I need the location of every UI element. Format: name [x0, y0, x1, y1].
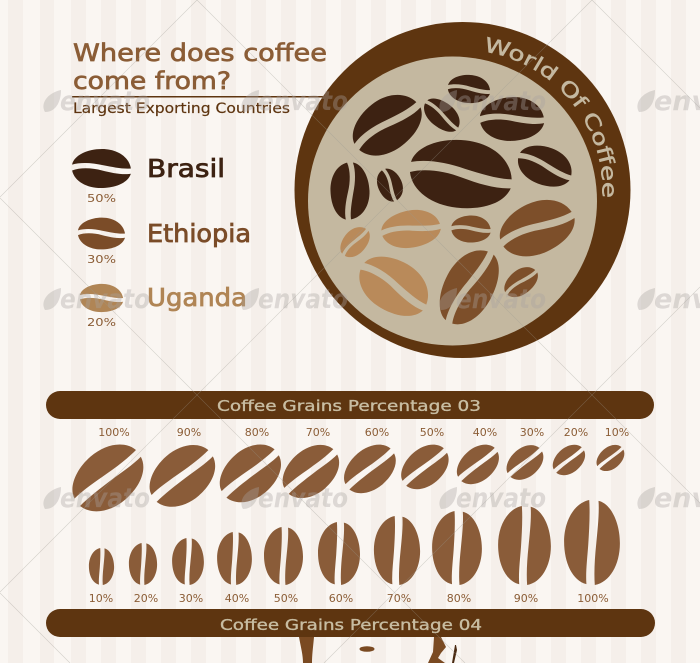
legend: Brasil: 50% — [87, 192, 116, 205]
percent labels: 50% — [274, 592, 298, 605]
watermark logos: envato — [60, 86, 150, 117]
percent labels: 10% — [89, 592, 113, 605]
legend: Uganda: Uganda — [147, 283, 247, 312]
percent labels: 100% — [98, 426, 130, 439]
legend: Brasil — [72, 149, 225, 205]
percent labels: 40% — [225, 592, 249, 605]
watermark logos: envato — [456, 483, 546, 514]
percent labels: 100% — [577, 592, 609, 605]
beans — [89, 500, 620, 585]
watermark logos: envato — [60, 284, 150, 315]
percent labels: 30% — [520, 426, 544, 439]
watermark logos: envato — [456, 284, 546, 315]
medium brown beans — [428, 189, 582, 334]
legend: Uganda: 20% — [87, 316, 116, 329]
title: come from? — [73, 67, 231, 95]
watermark logos: envato — [258, 284, 348, 315]
legend: Brasil: Brasil — [147, 154, 225, 183]
title: Where does coffee — [73, 39, 327, 67]
banner: percentage 03 — [46, 391, 654, 419]
watermark logos: envato — [258, 86, 348, 117]
legend: Ethiopia: Ethiopia — [147, 219, 251, 248]
percent labels: 90% — [514, 592, 538, 605]
coffee drips — [299, 637, 457, 663]
percent labels: 60% — [365, 426, 389, 439]
dark beans — [330, 74, 578, 220]
panel: world of coffee badge — [294, 22, 630, 358]
chart: percentage 03 diagonal beans — [60, 426, 629, 525]
legend: Uganda — [80, 283, 247, 329]
watermark logos: envato — [258, 483, 348, 514]
watermark logos: envato — [456, 86, 546, 117]
banner: percentage 03: Coffee Grains Percentage 03 — [217, 397, 481, 415]
title — [73, 39, 327, 95]
percent labels: 70% — [387, 592, 411, 605]
subtitle: Largest Exporting Countries — [73, 101, 290, 117]
percent labels: 20% — [134, 592, 158, 605]
percent labels: 60% — [329, 592, 353, 605]
banner: percentage 04: Coffee Grains Percentage 04 — [220, 616, 482, 634]
percent labels: 40% — [473, 426, 497, 439]
percent labels — [98, 426, 629, 439]
percent labels: 30% — [179, 592, 203, 605]
legend: Ethiopia: 30% — [87, 253, 116, 266]
percent labels — [89, 592, 609, 605]
percent labels: 80% — [447, 592, 471, 605]
badge heading: World Of Coffee — [487, 36, 616, 197]
percent labels: 20% — [564, 426, 588, 439]
percent labels: 80% — [245, 426, 269, 439]
legend: Ethiopia — [78, 218, 251, 266]
percent labels: 70% — [306, 426, 330, 439]
percent labels: 90% — [177, 426, 201, 439]
banner: percentage 04 — [46, 609, 655, 637]
title rule — [72, 96, 324, 98]
beans — [60, 431, 629, 525]
percent labels: 50% — [420, 426, 444, 439]
light brown beans — [335, 206, 443, 327]
chart: percentage 04 upright beans — [89, 500, 620, 605]
watermark logos — [43, 86, 700, 514]
percent labels: 10% — [605, 426, 629, 439]
watermark logos: envato — [60, 483, 150, 514]
